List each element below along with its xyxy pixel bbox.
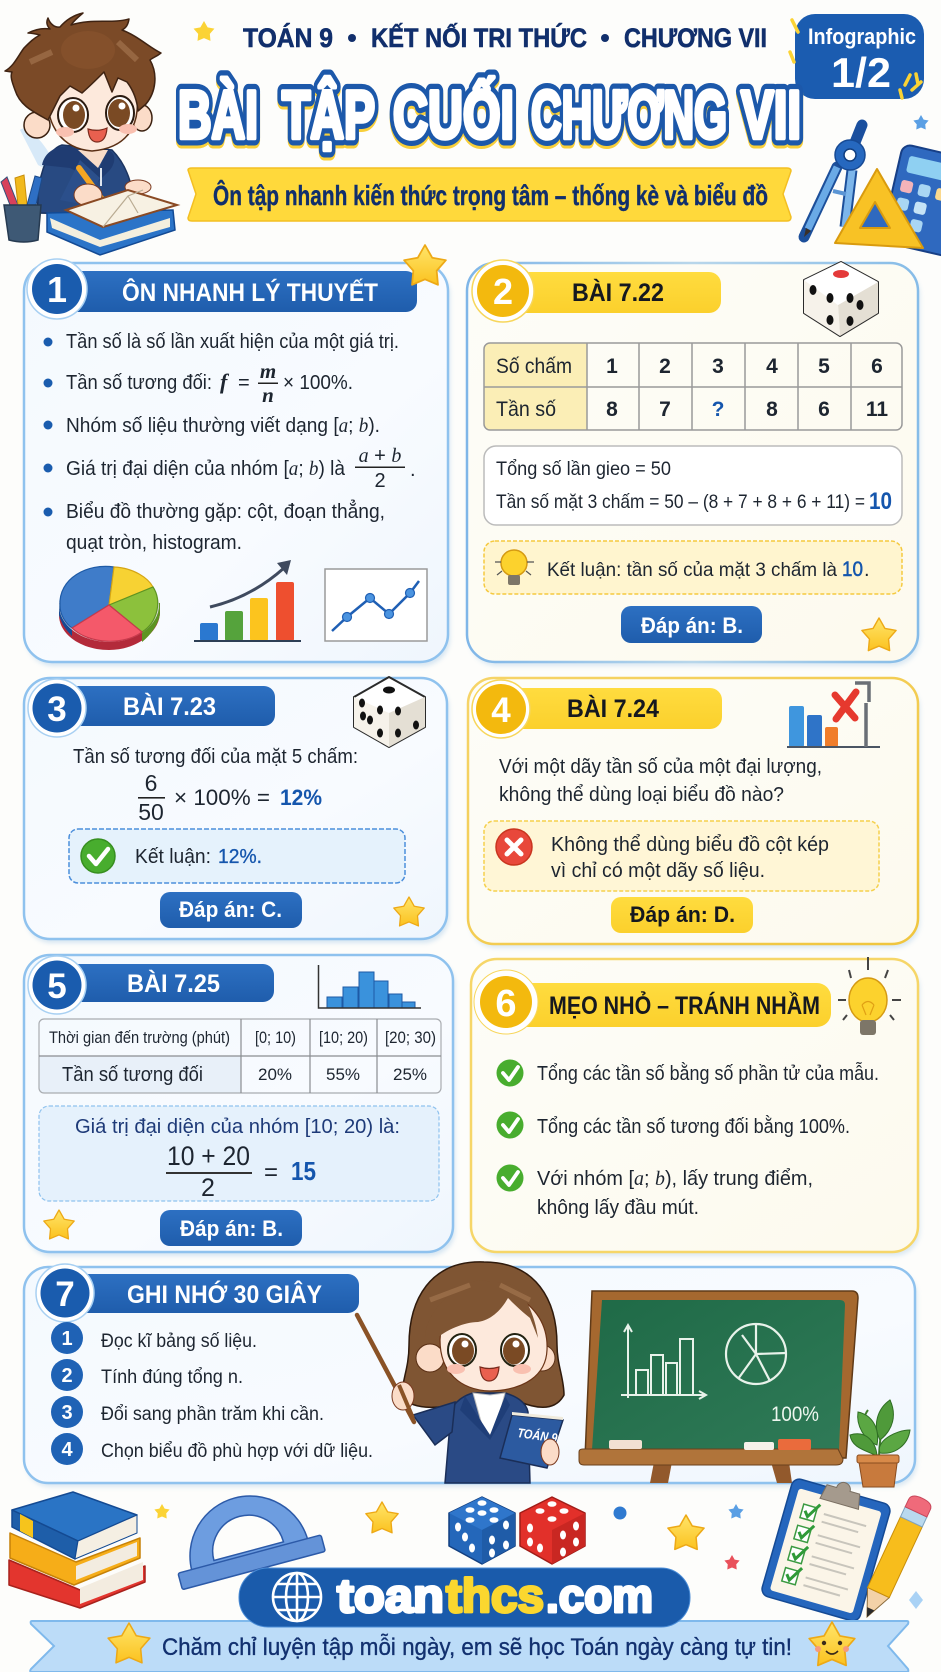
badge: infographic 1/2 — [790, 14, 924, 99]
table: dots and frequency: 6 — [818, 398, 830, 421]
checklist — [51, 1322, 373, 1465]
table: travel time: 20% — [258, 1065, 292, 1084]
tip list: Tổng các tần số tương đối bằng 100%. — [537, 1115, 850, 1138]
icon: math book — [500, 1412, 563, 1468]
number badge 2: 2 — [493, 271, 513, 312]
answer pill: Đáp án: C. — [179, 897, 282, 922]
formula: midpoint value: 2 — [201, 1174, 215, 1202]
hair — [5, 13, 161, 120]
dot decoration — [614, 1506, 626, 1520]
illustration: potted plant — [850, 1400, 910, 1487]
website pill: toan — [337, 1569, 444, 1622]
icon: smiling star — [809, 1622, 855, 1665]
question text: Tần số tương đối của mặt 5 chấm: — [73, 746, 358, 768]
checklist: Đọc kĩ bảng số liệu. — [101, 1331, 257, 1352]
bullet list: Nhóm số liệu thường viết dạng [a; b). — [66, 415, 380, 437]
icon: star — [862, 618, 896, 651]
formula: relative frequency: n — [262, 383, 274, 407]
icon: math book: TOÁN 9 — [517, 1425, 559, 1446]
icon: star — [394, 897, 424, 926]
panel 1: theory review — [24, 245, 450, 666]
table: travel time: [20; 30) — [385, 1028, 436, 1047]
table: dots and frequency: 8 — [766, 398, 778, 421]
star decoration — [154, 1504, 170, 1518]
icon: protractor — [163, 1479, 325, 1590]
bullet list — [44, 331, 416, 554]
number badge 2 — [472, 260, 534, 322]
table: travel time: Tần số tương đối — [62, 1064, 203, 1086]
calculation box: Tổng số lần gieo = 50 — [496, 458, 671, 480]
tip list: Tổng các tần số bằng số phần tử của mẫu. — [537, 1062, 879, 1085]
question text: Với một dãy tần số của một đại lượng, — [499, 756, 822, 778]
chalk drawing: pie chart — [726, 1324, 786, 1384]
small header line — [243, 21, 767, 53]
number badge 1: 1 — [47, 269, 67, 310]
icon: compass — [804, 125, 865, 237]
title: CHƯƠNG — [531, 80, 727, 156]
table: travel time: 25% — [393, 1065, 427, 1084]
illustration: teacher girl — [357, 1262, 564, 1483]
star decoration — [366, 1502, 398, 1533]
heading bar — [70, 1274, 359, 1313]
icon: light bulb — [495, 550, 534, 585]
small header line: CHƯƠNG VII — [624, 23, 767, 53]
heading bar: BÀI 7.23 — [123, 692, 216, 721]
title: CUỐI — [393, 79, 514, 156]
number badge 5: 5 — [47, 967, 67, 1006]
table: dots and frequency: 4 — [766, 355, 778, 378]
small header line: KẾT NỐI TRI THỨC — [371, 21, 587, 53]
formula: midpoint: . — [410, 459, 416, 481]
title: VII — [741, 80, 801, 156]
table: travel time: 55% — [326, 1065, 360, 1084]
question text: không thể dùng loại biểu đồ nào? — [499, 784, 784, 806]
icon: green check — [496, 1060, 524, 1086]
title: BÀI — [178, 77, 258, 153]
icon: calculator — [881, 144, 941, 261]
small header line: TOÁN 9 — [243, 22, 333, 53]
heading pill — [510, 983, 831, 1027]
table: dots and frequency: 7 — [659, 398, 671, 421]
illustration: chalkboard — [579, 1291, 858, 1483]
star decoration — [724, 1555, 740, 1569]
formula: relative frequency: × 100%. — [283, 372, 353, 394]
conclusion box: 10 — [842, 558, 863, 581]
icon: star — [44, 1210, 74, 1239]
answer pill — [621, 606, 762, 643]
formula: midpoint — [355, 445, 416, 492]
icon: red die — [520, 1497, 585, 1564]
formula: 6/50: 12% — [280, 785, 322, 810]
icon: star — [404, 245, 446, 285]
table: travel time: [10; 20) — [319, 1028, 368, 1047]
star decoration — [668, 1515, 704, 1549]
chalk label: 100% — [771, 1403, 819, 1426]
heading pill: BÀI 7.22 — [572, 278, 664, 307]
encouragement ribbon: Chăm chỉ luyện tập mỗi ngày, em sẽ học Toán ngày càng tự tin! — [162, 1634, 792, 1661]
conclusion box — [69, 829, 405, 883]
table: dots and frequency: 6 — [871, 355, 883, 378]
table: dots and frequency: 3 — [712, 355, 724, 378]
checklist: 2 — [61, 1365, 73, 1387]
tip list: Với nhóm [a; b), lấy trung điểm, — [537, 1168, 813, 1190]
icon: pencil in hand — [74, 168, 151, 207]
table: travel time — [39, 1019, 441, 1093]
chalk drawing: bar chart — [621, 1325, 706, 1399]
title — [178, 76, 801, 156]
number badge 5 — [28, 956, 86, 1014]
tip list: không lấy đầu mút. — [537, 1197, 699, 1219]
number badge 4 — [472, 680, 530, 738]
heading bar — [60, 964, 274, 1002]
title: TẬP — [282, 76, 375, 153]
formula: midpoint: 2 — [374, 470, 386, 492]
panel 3: exercise 7.23 — [24, 677, 449, 943]
explanation box — [484, 821, 879, 891]
heading bar: BÀI 7.25 — [127, 969, 220, 998]
title: TẬP — [282, 76, 375, 153]
icon: raised arm — [413, 1402, 455, 1445]
heading bar: ÔN NHANH LÝ THUYẾT — [122, 277, 378, 307]
panel 4: exercise 7.24 — [468, 678, 920, 948]
title: TẬP — [282, 79, 375, 156]
star decoration — [194, 21, 214, 41]
heading bar — [60, 686, 275, 726]
table: travel time: Thời gian đến trường (phút) — [49, 1028, 230, 1047]
table: dots and frequency — [484, 343, 902, 430]
icon: book stack — [47, 190, 177, 255]
number badge 1 — [27, 259, 87, 319]
formula: 6/50 — [138, 770, 322, 825]
formula: relative frequency — [220, 359, 353, 407]
number badge 4: 4 — [491, 691, 511, 730]
conclusion box: Kết luận: — [135, 846, 211, 868]
formula: midpoint value: 15 — [291, 1156, 316, 1186]
subtitle ribbon — [188, 168, 791, 221]
sparkle decoration — [909, 1591, 923, 1609]
icon: pointer stick — [357, 1315, 414, 1422]
table: dots and frequency: Tần số — [496, 398, 556, 421]
calculation box — [39, 1106, 439, 1202]
icon: line chart — [325, 569, 427, 641]
icon: rejected bar chart — [787, 683, 880, 747]
answer pill — [611, 897, 753, 933]
number badge 6 — [474, 970, 538, 1034]
title: VII — [741, 77, 801, 153]
checklist: Chọn biểu đồ phù hợp với dữ liệu. — [101, 1441, 373, 1462]
conclusion box — [484, 541, 902, 594]
panel 7: remember in 30 seconds — [24, 1262, 917, 1487]
table: dots and frequency: 8 — [606, 398, 618, 421]
panel 6: tips — [471, 957, 920, 1256]
explanation box: vì chỉ có một dãy số liệu. — [551, 860, 765, 882]
footer decorations — [9, 1469, 933, 1623]
heading pill — [505, 688, 722, 729]
table: dots and frequency: 5 — [818, 355, 830, 378]
calculation box — [484, 446, 902, 525]
icon: light bulb — [838, 957, 901, 1035]
conclusion box: . — [864, 559, 870, 581]
title: CHƯƠNG — [531, 77, 727, 153]
question text — [499, 756, 822, 806]
formula: relative frequency: f — [220, 369, 230, 394]
formula: midpoint value: = — [264, 1159, 278, 1186]
number badge 3 — [28, 679, 86, 737]
bullet list: Biểu đồ thường gặp: cột, đoạn thẳng, — [66, 499, 385, 523]
website pill: thcs — [446, 1569, 544, 1622]
title: VII — [741, 77, 801, 153]
heading bar: GHI NHỚ 30 GIÂY — [127, 1279, 322, 1309]
table: dots and frequency: Số chấm — [496, 355, 572, 378]
icon: book stack — [9, 1492, 145, 1608]
calculation box: 10 — [869, 488, 892, 515]
icon: blue star — [913, 115, 929, 129]
checklist: Đổi sang phần trăm khi cần. — [101, 1404, 324, 1425]
answer pill — [160, 892, 302, 928]
panel 2: exercise 7.22 — [467, 260, 920, 666]
bullet list: Tần số là số lần xuất hiện của một giá trị. — [66, 331, 399, 353]
icon: die — [354, 677, 425, 747]
header — [1, 13, 941, 261]
panel 5: exercise 7.25 — [24, 955, 455, 1256]
calculation box: Tần số mặt 3 chấm = 50 – (8 + 7 + 8 + 6 + 11) = — [496, 491, 865, 513]
number badge 6: 6 — [495, 983, 517, 1025]
bullet list: quạt tròn, histogram. — [66, 532, 242, 554]
table: dots and frequency: 1 — [606, 355, 618, 378]
bullet list: Giá trị đại diện của nhóm [a; b) là — [66, 458, 346, 480]
table: dots and frequency: 11 — [866, 398, 888, 421]
icon: 3D pie chart — [59, 566, 160, 650]
number badge 7: 7 — [55, 1275, 75, 1314]
formula: relative frequency: m — [260, 359, 276, 383]
icon: clipboard — [760, 1469, 894, 1623]
website pill — [239, 1568, 690, 1627]
icon: bar chart with arrow — [194, 560, 301, 641]
formula: midpoint: a + b — [359, 445, 401, 467]
icon: red cross — [496, 829, 532, 865]
illustration: boy studying — [1, 13, 177, 255]
title: CHƯƠNG — [531, 77, 727, 153]
star decoration — [728, 1504, 744, 1518]
formula: 6/50: 6 — [145, 770, 157, 796]
table: dots and frequency: 2 — [659, 355, 671, 378]
formula: 6/50: × 100% = — [174, 785, 270, 810]
icon: green check — [81, 839, 115, 873]
tip list — [496, 1060, 879, 1219]
answer pill: Đáp án: B. — [180, 1216, 283, 1241]
table: dots and frequency: ? — [712, 398, 724, 421]
icon: blue die — [449, 1497, 515, 1564]
conclusion box: Kết luận: tần số của mặt 3 chấm là — [547, 559, 837, 581]
answer pill — [160, 1210, 302, 1246]
checklist: 4 — [61, 1439, 73, 1461]
answer pill: Đáp án: D. — [630, 902, 735, 927]
icon: pencil cup — [1, 175, 42, 242]
badge: infographic 1/2: 1/2 — [831, 49, 891, 96]
website pill: .com — [546, 1569, 653, 1622]
number badge 3: 3 — [47, 690, 67, 729]
table: travel time: [0; 10) — [255, 1028, 296, 1047]
icon: triangle ruler — [835, 169, 923, 248]
icon: die — [804, 262, 878, 336]
title: BÀI — [178, 77, 258, 153]
icon: green check — [496, 1164, 524, 1192]
explanation box: Không thể dùng biểu đồ cột kép — [551, 834, 829, 856]
checklist: 1 — [61, 1328, 73, 1350]
badge: infographic 1/2: Infographic — [808, 24, 916, 49]
subtitle ribbon: Ôn tập nhanh kiến thức trọng tâm – thống kè và biểu đồ — [213, 179, 768, 211]
formula: midpoint value — [166, 1141, 316, 1202]
encouragement ribbon — [30, 1621, 908, 1672]
icon: globe — [273, 1573, 321, 1621]
number badge 7 — [36, 1264, 94, 1322]
title: CUỐI — [393, 76, 514, 153]
formula: relative frequency: = — [238, 372, 250, 394]
conclusion box: 12%. — [218, 846, 262, 868]
heading pill: MẸO NHỎ – TRÁNH NHẦM — [549, 990, 820, 1020]
heading bar — [60, 271, 417, 312]
heading pill: BÀI 7.24 — [567, 694, 659, 723]
title: CUỐI — [393, 76, 514, 153]
icon: pencil — [856, 1493, 933, 1622]
icon: histogram — [318, 965, 421, 1008]
checklist: Tính đúng tổng n. — [101, 1367, 243, 1388]
formula: 6/50: 50 — [138, 799, 164, 825]
heading pill — [505, 272, 721, 313]
formula: midpoint value: 10 + 20 — [167, 1141, 250, 1171]
calculation box: Giá trị đại diện của nhóm [10; 20) là: — [75, 1116, 400, 1138]
title: BÀI — [178, 80, 258, 156]
answer pill: Đáp án: B. — [641, 613, 743, 638]
icon: star — [108, 1623, 150, 1663]
bullet list: Tần số tương đối: — [66, 372, 212, 394]
checklist: 3 — [61, 1402, 73, 1424]
icon: green check — [496, 1112, 524, 1138]
